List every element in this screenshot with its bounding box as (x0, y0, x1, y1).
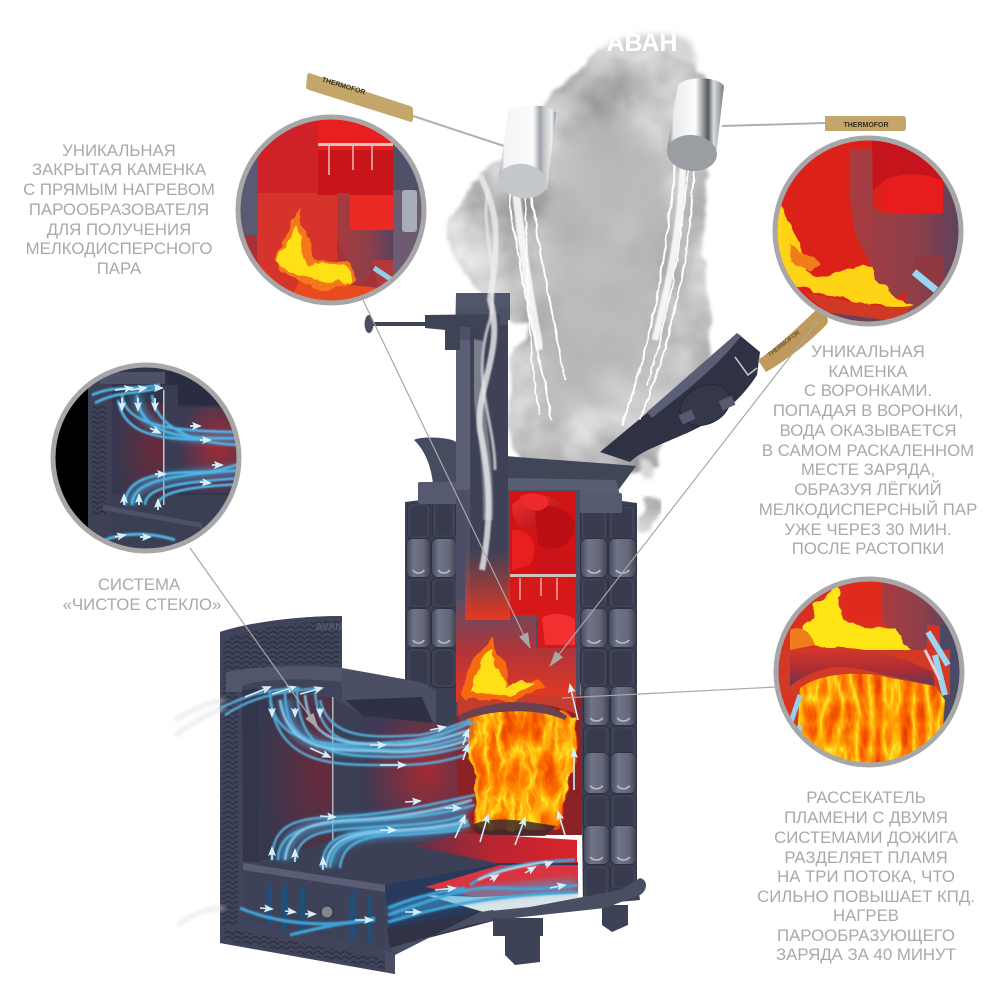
funnel cup (414, 438, 456, 500)
text block: flame divider: ЗАРЯДА ЗА 40 МИНУТ (776, 945, 956, 964)
left ladle (306, 73, 556, 202)
airflow glow bundles (285, 700, 575, 915)
text block: clean glass system: СИСТЕМА (98, 575, 181, 594)
right ladle (665, 78, 906, 174)
text block: heater with funnels: МЕЛКОДИСПЕРСНЫЙ ПАР (759, 500, 977, 519)
text block: heater with funnels: УЖЕ ЧЕРЕЗ 30 МИН. (784, 520, 952, 539)
flame divider and main fire (455, 695, 582, 836)
water stream from right ladle (622, 165, 695, 425)
airflow arrows (245, 685, 578, 920)
text block: closed heater: ПАРА (97, 259, 142, 278)
lid handle (758, 310, 828, 372)
airflow: ash pan (240, 860, 578, 935)
right ladle: THERMOFOR (843, 122, 889, 129)
text block: flame divider: РАЗДЕЛЯЕТ ПЛАМЯ (784, 848, 948, 867)
left glass wall (257, 690, 333, 862)
callout line: circle 1 (363, 300, 530, 648)
airflow: upper glass (220, 688, 475, 765)
firebox red back wall (362, 716, 470, 842)
text block: heater with funnels: КАМЕНКА (828, 362, 908, 381)
text block: clean glass system: «ЧИСТОЕ СТЕКЛО» (63, 595, 221, 614)
chamber: stones, rods and inner wall (456, 490, 580, 730)
firebox door and fire section (175, 616, 646, 974)
text block: flame divider: СИСТЕМАМИ ДОЖИГА (774, 828, 959, 847)
text block: heater with funnels: УНИКАЛЬНАЯ (811, 342, 925, 361)
upper flame (462, 636, 542, 700)
door backing (220, 616, 578, 974)
text block: closed heater: ЗАКРЫТАЯ КАМЕНКА (32, 160, 207, 179)
text block: closed heater: УНИКАЛЬНАЯ (62, 141, 176, 160)
text block: closed heater: С ПРЯМЫМ НАГРЕВОМ (23, 180, 215, 199)
text block: flame divider: РАССЕКАТЕЛЬ (806, 788, 926, 807)
steam cloud (453, 34, 713, 542)
text block: heater with funnels: С ВОРОНКАМИ. (804, 381, 932, 400)
hinged lid (600, 333, 760, 462)
airflow haze outside door (175, 700, 225, 925)
right tile column (578, 493, 640, 905)
base and legs (390, 878, 646, 965)
callout line: circle 4 (562, 687, 776, 698)
ash pan with red and white stone (385, 863, 578, 948)
text block: closed heater (23, 141, 215, 278)
circle detail: closed heater (237, 117, 428, 307)
text block: heater with funnels: ВОДА ОКАЗЫВАЕТСЯ (780, 421, 956, 440)
text block: heater with funnels: ОБРАЗУЯ ЛЁГКИЙ (794, 480, 942, 499)
stove body (364, 293, 828, 905)
text block: heater with funnels: МЕСТЕ ЗАРЯДА, (801, 460, 935, 479)
text block: closed heater: ПАРООБРАЗОВАТЕЛЯ (29, 200, 209, 219)
floor (243, 840, 498, 884)
text block: flame divider: НАГРЕВ (833, 906, 899, 925)
firebox side wall top (342, 668, 436, 722)
callout line: circle 3 (190, 548, 318, 728)
text block: heater with funnels: В САМОМ РАСКАЛЕННОМ (762, 441, 974, 460)
lid handle: THERMOFOR (767, 330, 802, 358)
text block: flame divider: ПЛАМЕНИ С ДВУМЯ (784, 808, 948, 827)
left tile column (405, 482, 460, 730)
circle detail: clean glass (50, 362, 245, 557)
text block: heater with funnels (759, 342, 977, 558)
lower door grate (243, 863, 395, 973)
column between walls (333, 698, 362, 845)
door frame (220, 616, 395, 974)
callout line: circle 2 (550, 322, 817, 666)
chimney pipe (364, 293, 510, 620)
left ladle: THERMOFOR (321, 77, 366, 97)
text block: heater with funnels: ПОПАДАЯ В ВОРОНКИ, (773, 401, 963, 420)
airflow: lower glass (272, 795, 475, 868)
firebox dark inner top (345, 697, 433, 723)
text block: flame divider (757, 788, 975, 964)
text block: closed heater: МЕЛКОДИСПЕРСНОГО (26, 239, 212, 258)
text block: heater with funnels: ПОСЛЕ РАСТОПКИ (792, 539, 944, 558)
heater pot rim (505, 456, 636, 492)
text block: flame divider: ПАРООБРАЗУЮЩЕГО (777, 926, 955, 945)
text block: closed heater: ДЛЯ ПОЛУЧЕНИЯ (47, 220, 191, 239)
red hearth (413, 833, 577, 863)
text block: flame divider: СИЛЬНО ПОВЫШАЕТ КПД. (757, 887, 975, 906)
text block: flame divider: НА ТРИ ПОТОКА, ЧТО (777, 867, 955, 886)
door frame: AVAN (316, 622, 342, 633)
text block: clean glass system (63, 575, 221, 614)
circle detail: funnels (775, 137, 965, 330)
water stream from left ladle (508, 178, 565, 420)
smoke wisp from chimney (476, 175, 496, 570)
circle detail: flame divider (775, 578, 966, 770)
brand text on cloud: АВАН (607, 29, 677, 57)
